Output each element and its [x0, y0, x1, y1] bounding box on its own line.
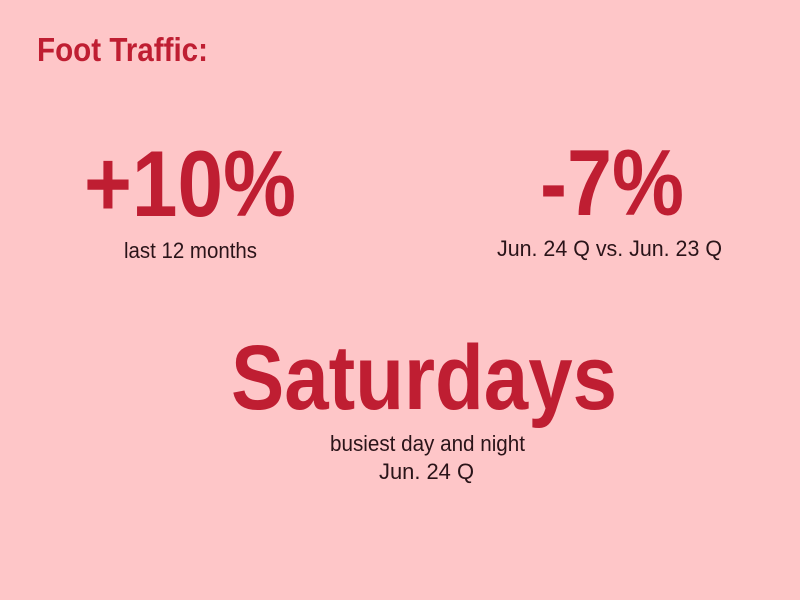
label: last 12 months: last 12 months [124, 238, 257, 263]
stat: +10%: +10% [84, 131, 296, 236]
label: Jun. 24 Q: Jun. 24 Q [379, 459, 474, 484]
label: busiest day and night: busiest day and night [330, 431, 525, 456]
stat: -7%: -7% [540, 130, 684, 235]
stat: Saturdays: Saturdays [231, 327, 617, 429]
title: Foot Traffic: [37, 31, 208, 68]
label: quarter comparison: Jun. 24 Q vs. Jun. 23 Q [497, 236, 722, 261]
